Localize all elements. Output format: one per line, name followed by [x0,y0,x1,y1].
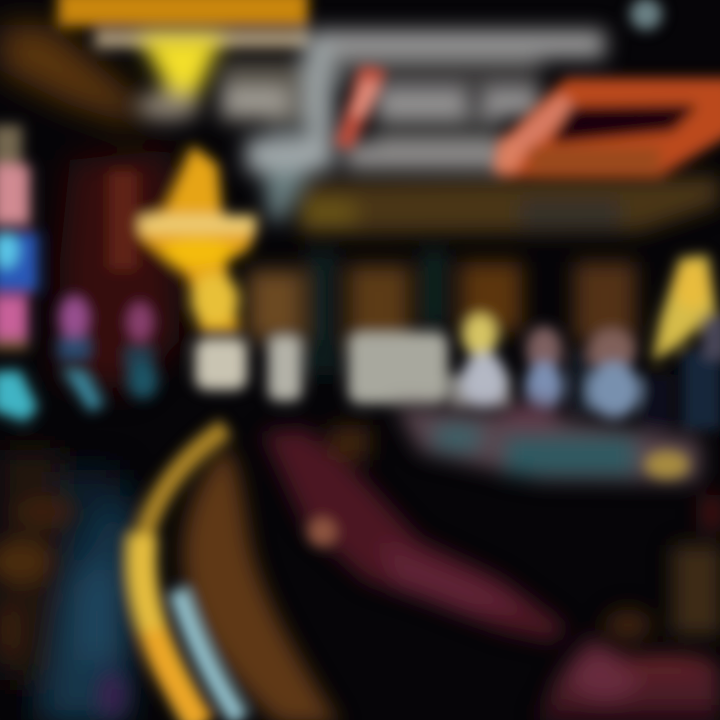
glass reflection [178,590,240,720]
dark blue carpet [40,490,130,720]
warm floor patches [0,498,75,660]
grey sign [220,30,605,222]
maroon sofa near [262,425,565,642]
left machines [0,125,158,422]
purple carpet patch [98,671,126,719]
chandelier top band [58,0,310,48]
balcony pillars and arches [248,250,636,375]
brown ledge under sign [295,176,720,235]
icon: gold chip on table [645,451,689,479]
icon: sofa highlight [307,517,337,547]
yellow star lamp [122,145,258,332]
row of figures [195,313,720,430]
background glows [0,25,180,720]
curved yellow rail [140,428,226,720]
icon: yellow lamp [136,36,224,121]
maroon sofa lower right [540,635,720,720]
right wall patches [604,495,720,641]
orange hexagon sign [492,78,720,176]
gaming table [395,402,700,482]
icon: small round light [630,0,662,30]
red sign stripe [334,65,386,150]
yellow right lamp [652,255,720,362]
brown curved wall [183,445,340,720]
